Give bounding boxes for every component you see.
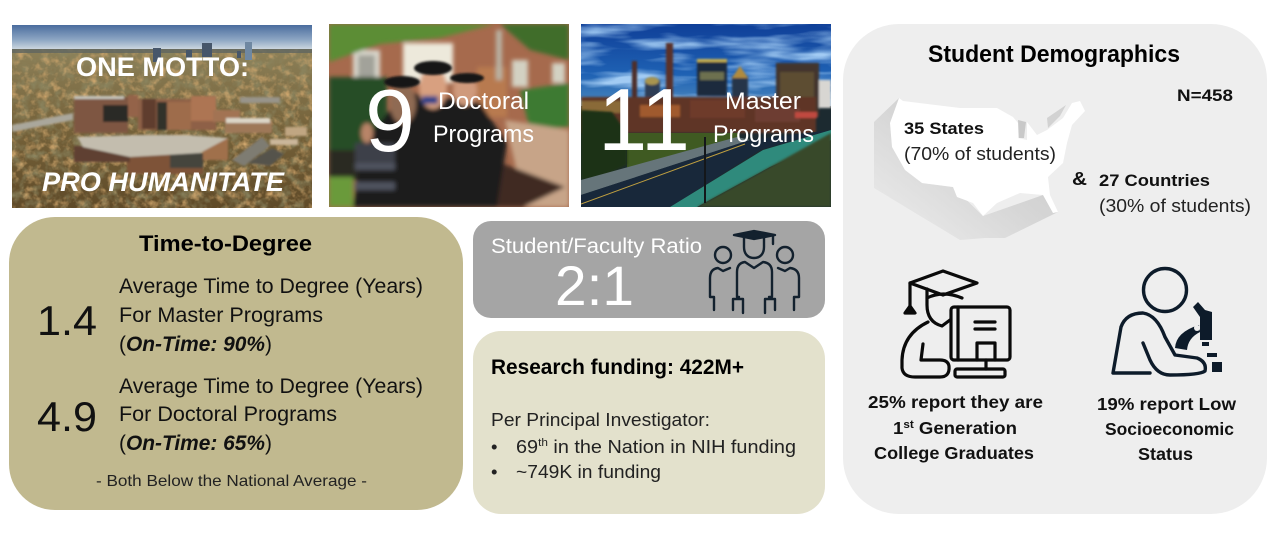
heading: time-to-degree: Time-to-Degree	[139, 231, 312, 256]
text: 9 doctoral programs: Doctoral	[438, 88, 529, 115]
heading: one motto: ONE MOTTO:	[76, 52, 249, 82]
panel: student demographics	[843, 24, 1267, 514]
text: per principal investigator: •	[491, 461, 497, 482]
text: sample size: N=458	[1177, 87, 1233, 105]
text: 9 doctoral programs: 9	[365, 71, 415, 170]
stat: doctoral programs: 4.9	[37, 393, 97, 440]
text: 35 states	[904, 119, 1056, 164]
panel: research funding	[473, 331, 825, 514]
text: 11 master programs: 11	[598, 70, 690, 169]
stat: doctoral programs	[37, 375, 423, 455]
caption: first generation: Generation	[914, 418, 1017, 438]
text: 27 countries	[1099, 171, 1251, 216]
text: per principal investigator: in the Nation in NIH funding	[548, 436, 796, 457]
text: 9 doctoral programs	[365, 71, 534, 170]
heading: research funding: Research funding: 422M+	[491, 356, 744, 379]
stat: master programs	[37, 275, 423, 356]
text: 9 doctoral programs: Programs	[433, 121, 534, 148]
stat: doctoral programs: For Doctoral Programs	[119, 403, 337, 426]
text: 11 master programs: Programs	[713, 121, 814, 148]
text: per principal investigator: Per Principal Investigator:	[491, 409, 710, 430]
value: 2:1: 2:1	[555, 254, 634, 317]
text: ampersand: &	[1072, 169, 1087, 189]
text: per principal investigator: ~749K in funding	[516, 461, 661, 482]
text: 11 master programs	[598, 70, 814, 169]
caption: low socioeconomic status: Status	[1138, 444, 1193, 464]
text: 35 states: 35 States	[904, 119, 984, 138]
text: per principal investigator: 69	[516, 436, 537, 457]
text: 35 states: (70% of students)	[904, 144, 1056, 164]
map: united states	[874, 98, 1085, 240]
stat: master programs: Average Time to Degree (Years)	[119, 275, 423, 298]
stat: doctoral programs: Average Time to Degree (Years)	[119, 375, 423, 398]
icon: three graduates	[710, 231, 799, 313]
text: 27 countries: 27 Countries	[1099, 171, 1210, 190]
photo panel: doctoral programs	[329, 24, 569, 207]
text: per principal investigator: •	[491, 436, 497, 457]
caption: first generation: st	[903, 419, 914, 431]
icon: researcher at microscope	[1113, 268, 1222, 375]
panel: time-to-degree	[9, 217, 463, 510]
stat: master programs: 1.4	[37, 297, 97, 344]
photo panel: one motto	[12, 25, 312, 208]
text: 27 countries: (30% of students)	[1099, 196, 1251, 216]
heading: student demographics: Student Demographics	[928, 41, 1180, 68]
caption: first generation	[868, 392, 1043, 463]
text: per principal investigator	[491, 409, 796, 482]
stat: master programs: For Master Programs	[119, 304, 323, 327]
caption: low socioeconomic status	[1097, 394, 1236, 464]
stat: doctoral programs: (On-Time: 65%)	[119, 432, 272, 455]
text: 11 master programs: Master	[725, 88, 801, 115]
caption: low socioeconomic status: Socioeconomic	[1105, 419, 1234, 439]
label: student/faculty ratio: Student/Faculty Ratio	[491, 235, 702, 258]
caption: first generation: 25% report they are	[868, 392, 1043, 412]
note: below national average: - Both Below the National Average -	[96, 473, 367, 490]
caption: first generation: College Graduates	[874, 443, 1034, 463]
icon: graduate at computer	[902, 271, 1010, 377]
caption: low socioeconomic status: 19% report Low	[1097, 394, 1236, 414]
text: per principal investigator: th	[538, 437, 548, 449]
caption: first generation: 1	[893, 418, 903, 438]
stat: master programs: (On-Time: 90%)	[119, 333, 272, 356]
panel: student faculty ratio	[473, 221, 825, 318]
text: pro humanitate: PRO HUMANITATE	[42, 167, 285, 197]
photo panel: master programs	[581, 24, 831, 207]
